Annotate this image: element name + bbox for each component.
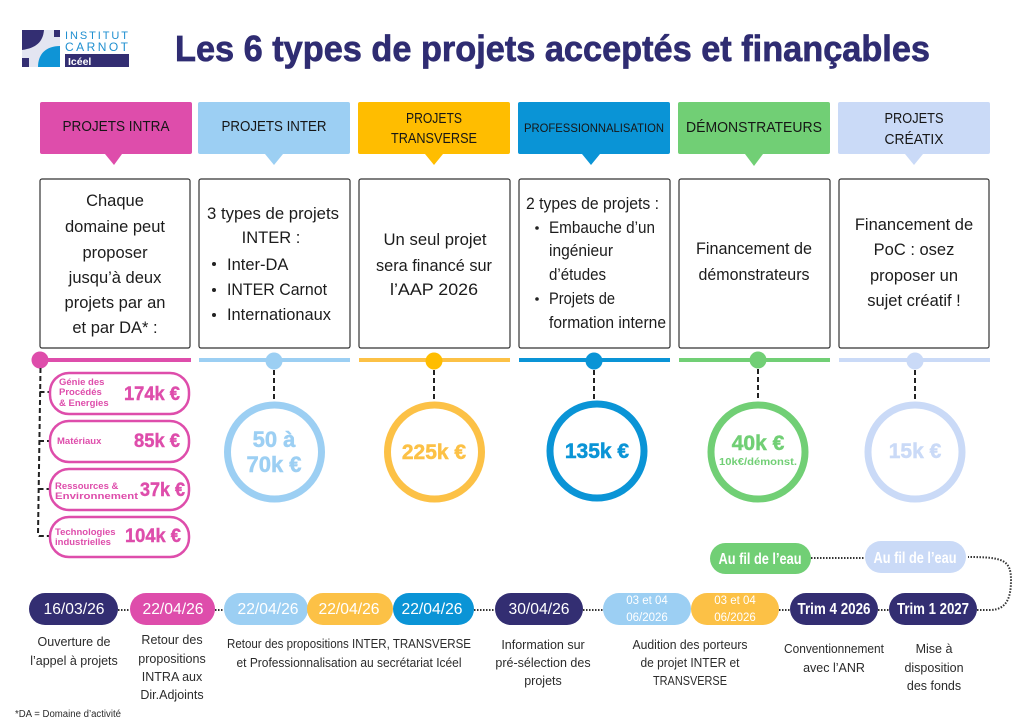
caption: retour Intra: Retour des <box>141 633 203 647</box>
date pill: Au fil de l'eau green <box>710 543 811 574</box>
date pill: Intra 22/04/26 <box>130 593 215 625</box>
text box: Professionnalisation: formation interne <box>549 314 666 332</box>
caption: retour Inter, Transverse, Professionnalisation <box>227 637 471 670</box>
date pill: Trim 4 2026 <box>790 593 878 625</box>
timeline node and amount: Démonstrateurs: 10k€/démonst. <box>719 457 797 468</box>
caption: retour Intra <box>138 633 206 702</box>
text box: Inter: Internationaux <box>227 306 332 324</box>
text box: Créatix: sujet créatif ! <box>867 292 961 310</box>
timeline node and amount: Créatix: 15k € <box>889 440 942 463</box>
header: Projets Inter <box>198 102 350 165</box>
date pill: Inter 22/04/26 <box>224 593 308 625</box>
logo: Institut Carnot Icéel <box>22 30 129 68</box>
date pill: Inter audition: 06/2026 <box>626 612 668 624</box>
date pill: 30/04/26: 30/04/26 <box>508 601 570 618</box>
date pill: 16/03/26 <box>29 593 118 625</box>
funding pill: Matériaux: 85k € <box>134 431 180 452</box>
date pill: Au fil de l'eau green: Au fil de l’eau <box>718 551 802 568</box>
caption: retour Intra: INTRA aux <box>142 670 203 684</box>
text box: Transverse: l’AAP 2026 <box>390 281 478 299</box>
funding pill: Technologies <box>50 517 189 557</box>
header: Projets Transverse: PROJETS <box>406 110 462 127</box>
text box: Professionnalisation: 2 types de projets : <box>526 195 659 213</box>
logo: Institut Carnot Icéel: CARNOT <box>65 40 129 54</box>
funding pill: Technologies: 104k € <box>125 526 181 547</box>
date pill: Inter 22/04/26: 22/04/26 <box>238 601 298 618</box>
funding pill: Ressources: Ressources & <box>55 481 119 492</box>
text box: Professionnalisation: Embauche d’un <box>549 219 655 237</box>
date pill: Professionnalisation 22/04/26 <box>393 593 474 625</box>
text box: Créatix: Financement de <box>855 216 973 234</box>
text box: Créatix <box>839 179 989 348</box>
caption: ouverture: l’appel à projets <box>30 654 118 668</box>
funding pill: Technologies: industrielles <box>55 537 111 548</box>
caption: retour Intra: Dir.Adjoints <box>140 688 204 702</box>
date pill: Professionnalisation 22/04/26: 22/04/26 <box>402 601 462 618</box>
funding pill: Génie des Procédés: & Energies <box>59 398 109 409</box>
connector: Intra tree <box>38 368 50 536</box>
date pill: Au fil de l'eau light <box>865 541 966 573</box>
text box: Transverse: Un seul projet <box>384 231 487 249</box>
timeline node and amount: Inter: 50 à <box>253 427 296 452</box>
caption: pré-sélection: projets <box>524 674 562 688</box>
dotted timeline connectors <box>118 557 1011 610</box>
caption: retour Inter, Transverse, Professionnalisation: et Professionnalisation au secrétariat Icéel <box>236 656 462 670</box>
header: Projets Créatix <box>838 102 990 165</box>
timeline node and amount: Inter: 70k € <box>246 452 302 477</box>
text box: Intra <box>40 179 190 348</box>
header: Projets Créatix: CRÉATIX <box>884 131 944 148</box>
caption: pré-sélection: pré-sélection des <box>495 656 591 670</box>
header: Projets Intra: PROJETS INTRA <box>62 118 170 135</box>
timeline node and amount: Professionnalisation: 135k € <box>565 440 629 463</box>
text box: Intra: et par DA* : <box>72 319 158 337</box>
text box: Démonstrateurs: Financement de <box>696 240 812 258</box>
text box: Démonstrateurs <box>679 179 830 348</box>
timeline node and amount: Transverse <box>359 352 510 499</box>
timeline node and amount: Professionnalisation <box>519 352 670 498</box>
caption: ouverture <box>30 635 118 668</box>
date pill: Transverse 22/04/26 <box>307 593 393 625</box>
text box: Inter: 3 types de projets <box>207 205 339 223</box>
caption: audition <box>632 638 748 688</box>
funding pill: Génie des Procédés: Génie des <box>59 377 104 388</box>
header: Démonstrateurs: DÉMONSTRATEURS <box>686 119 822 136</box>
caption: ouverture: Ouverture de <box>38 635 111 649</box>
text box: Intra: proposer <box>82 244 148 262</box>
timeline node and amount: Inter <box>199 352 350 499</box>
date pill: Inter audition <box>603 593 691 625</box>
footnote: *DA = Domaine d’activité <box>15 709 121 720</box>
funding pill: Technologies: Technologies <box>55 527 116 538</box>
caption: retour Inter, Transverse, Professionnalisation: Retour des propositions INTER, TRANSVERSE <box>227 637 471 651</box>
caption: mise à disposition: disposition <box>904 661 964 675</box>
timeline node: Intra <box>32 352 191 368</box>
text box: Inter: Inter-DA <box>227 256 288 274</box>
funding pill: Génie des Procédés: 174k € <box>124 384 180 405</box>
text box: Professionnalisation: ingénieur <box>549 242 613 260</box>
caption: conventionnement: Conventionnement <box>784 642 884 656</box>
text box: Inter: INTER Carnot <box>227 281 327 299</box>
date pill: Inter audition: 03 et 04 <box>626 595 668 607</box>
text box: Créatix: proposer un <box>870 267 958 285</box>
text box: Inter <box>199 179 350 348</box>
text box: Démonstrateurs: démonstrateurs <box>698 266 810 284</box>
caption: conventionnement <box>784 642 884 675</box>
funding pill: Ressources: 37k € <box>140 480 185 501</box>
text box: Intra: domaine peut <box>65 218 165 236</box>
logo: Institut Carnot Icéel: Icéel <box>68 56 91 68</box>
text box: Créatix: PoC : osez <box>874 241 954 259</box>
text box: Professionnalisation: Projets de <box>549 290 615 308</box>
text box: Professionnalisation: d’études <box>549 266 606 284</box>
date pill: Trim 1 2027 <box>889 593 977 625</box>
caption: audition: de projet INTER et <box>640 656 740 670</box>
caption: retour Intra: propositions <box>138 652 206 666</box>
text box: Intra: Chaque <box>86 192 144 210</box>
date pill: Intra 22/04/26: 22/04/26 <box>142 601 204 618</box>
date pill: Transverse audition <box>691 593 779 625</box>
caption: pré-sélection <box>495 638 591 688</box>
caption: mise à disposition <box>904 642 964 693</box>
caption: pré-sélection: Information sur <box>501 638 585 652</box>
caption: mise à disposition: Mise à <box>916 642 952 656</box>
title: Les 6 types de projets acceptés et finançables <box>175 28 930 69</box>
funding pill: Matériaux <box>50 421 189 462</box>
date pill: Au fil de l'eau light: Au fil de l’eau <box>874 550 956 567</box>
header: Projets Inter: PROJETS INTER <box>222 118 327 135</box>
date pill: Transverse audition: 03 et 04 <box>714 595 756 607</box>
logo: Institut Carnot Icéel: INSTITUT <box>65 30 128 42</box>
timeline node and amount: Créatix <box>839 352 990 499</box>
date pill: Trim 4 2026: Trim 4 2026 <box>798 601 871 618</box>
header: Projets Transverse <box>358 102 510 165</box>
caption: audition: TRANSVERSE <box>653 674 727 688</box>
header: Professionnalisation: PROFESSIONNALISATION <box>524 121 664 135</box>
text box: Transverse <box>359 179 510 348</box>
funding pill: Génie des Procédés: Procédés <box>59 387 102 398</box>
caption: audition: Audition des porteurs <box>632 638 748 652</box>
funding pill: Génie des Procédés <box>50 373 189 414</box>
funding pill: Ressources <box>50 469 189 510</box>
funding pill: Matériaux: Matériaux <box>57 436 102 447</box>
header: Projets Créatix: PROJETS <box>884 110 944 127</box>
funding pill: Ressources: Environnement <box>55 491 139 502</box>
timeline node and amount: Transverse: 225k € <box>402 441 466 464</box>
caption: mise à disposition: des fonds <box>907 679 961 693</box>
text box: Intra: projets par an <box>65 294 165 312</box>
text box: Professionnalisation <box>519 179 670 348</box>
header: Démonstrateurs <box>678 102 830 166</box>
date pill: Trim 1 2027: Trim 1 2027 <box>897 601 969 618</box>
text box: Intra: jusqu’à deux <box>68 269 162 287</box>
header: Projets Transverse: TRANSVERSE <box>391 130 477 147</box>
header: Projets Intra <box>40 102 192 165</box>
date pill: Transverse audition: 06/2026 <box>714 612 756 624</box>
date pill: 16/03/26: 16/03/26 <box>44 601 104 618</box>
header: Professionnalisation <box>518 102 670 165</box>
timeline node and amount: Démonstrateurs: 40k € <box>732 432 785 455</box>
text box: Transverse: sera financé sur <box>376 257 492 275</box>
timeline node and amount: Démonstrateurs <box>679 352 830 499</box>
text box: Inter: INTER : <box>242 229 300 247</box>
caption: conventionnement: avec l’ANR <box>803 661 865 675</box>
date pill: Transverse 22/04/26: 22/04/26 <box>318 601 380 618</box>
date pill: 30/04/26 <box>495 593 583 625</box>
